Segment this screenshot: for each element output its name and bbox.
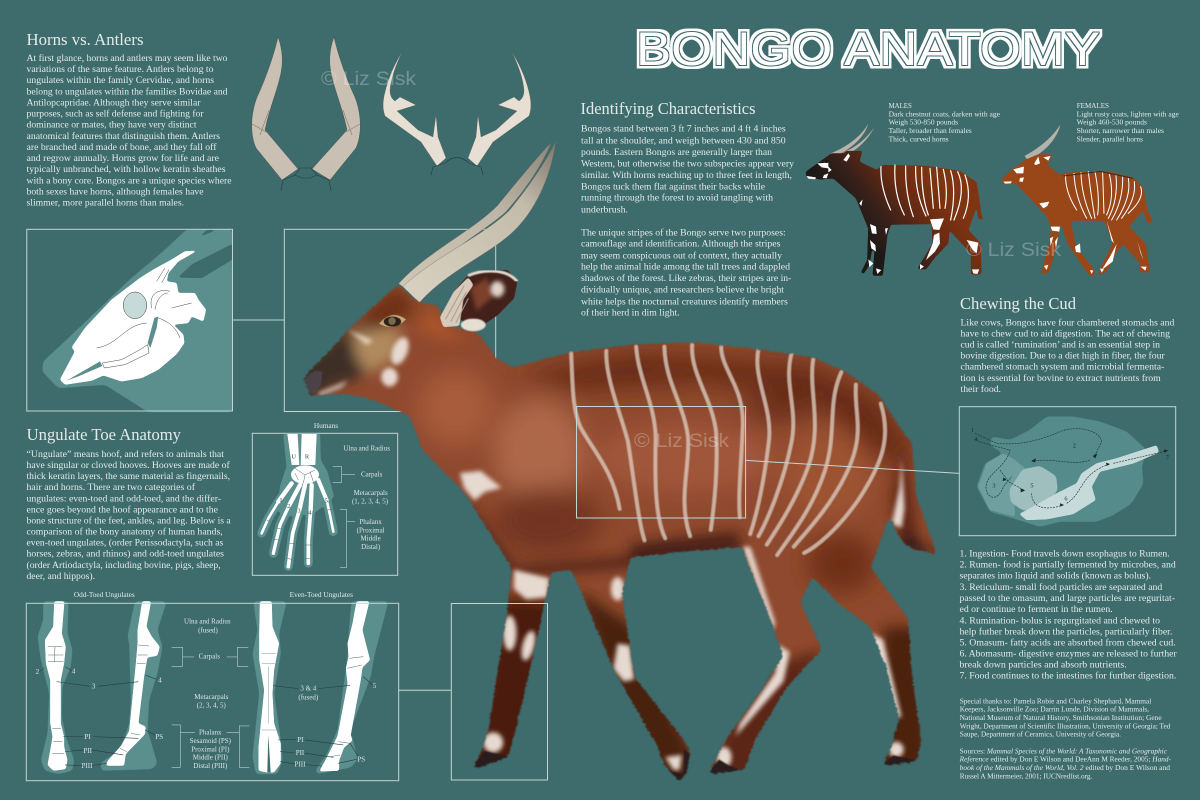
text block: horns vs antlers: typically unbranched, with hollow keratin sheathes	[26, 165, 226, 175]
labels: hand: Carpals	[361, 471, 383, 479]
text block: stripes: camouflage and identification. Although the stripes	[581, 239, 781, 250]
labels: ungulate bones	[36, 618, 377, 770]
text block: females: Weigh 460-530 pounds	[1077, 118, 1147, 127]
labels: ungulate bones: PII	[296, 749, 305, 757]
head shading	[294, 287, 414, 399]
text block: males	[889, 101, 1000, 143]
text block: ungulate: “Ungulate” means hoof, and refers to animals that	[26, 449, 224, 460]
panel: stomach diagram: 2	[1073, 443, 1076, 450]
text block: digestion steps: 5. Omasum- fatty acids are absorbed from chewed cud.	[960, 637, 1176, 648]
labels: ungulate bones: Proximal (PI)	[191, 745, 230, 753]
text block: stripes: The unique stripes of the Bongo serve two purposes:	[581, 227, 786, 238]
text block: ungulate: deer, and hippos).	[26, 571, 95, 582]
text block: sources: book of the Mammals of the World, Vol. 2 edited by Don E Wilson and	[960, 763, 1170, 772]
text block: stripes: dividually unique, and researchers believe the bright	[581, 286, 784, 296]
text block: stripes: shadows of the forest. Like zebras, their stripes are in-	[581, 273, 791, 284]
text block: sources: Russel A Mittermeier, 2001; IUCNredlist.org.	[960, 771, 1092, 780]
labels: ungulate bones: Ulna and Radius	[184, 618, 231, 626]
title: BONGO ANATOMY	[636, 22, 1100, 75]
panel: stomach diagram	[959, 407, 1176, 536]
labels: hand: (Proximal	[357, 526, 385, 534]
text block: horns vs antlers: Antilopcapridae. Although they serve similar	[26, 98, 201, 108]
icon: abomasum	[1019, 445, 1159, 520]
icon: odd-toed leg front	[38, 601, 74, 774]
text block: ungulate: hair and horns. There are two categories of	[26, 482, 196, 493]
icon: far horn	[399, 143, 551, 292]
text block: males: Weigh 530-850 pounds	[889, 118, 958, 127]
text block: stripes: white helps the nocturnal creatures identify members	[581, 296, 788, 307]
text block: horns vs antlers: purposes, such as self defense and fighting for	[26, 109, 204, 120]
text block: rumination: bovine digestion. Due to a diet high in fiber, the four	[960, 351, 1166, 362]
text block: size and subspecies: running through the forest to avoid tangling with	[581, 193, 773, 204]
labels: ungulate bones: PS	[155, 733, 163, 741]
panel: head callout frame	[284, 229, 496, 412]
labels: ungulate bones: PIII	[82, 762, 93, 770]
labels: ungulate bones: 2	[36, 668, 40, 676]
text block: special thanks: Keepers, Jacksonville Zoo; Darrin Lunde, Division of Mammals,	[960, 705, 1149, 714]
labels: ungulate bones: 5	[373, 682, 377, 690]
labels: ungulate bones: PII	[83, 747, 93, 755]
text block: size and subspecies: Western, but otherwise the two subspecies appear very	[581, 159, 794, 169]
panel: horns vs antlers text	[26, 30, 232, 208]
text block: digestion steps: passed to the omasum, and large particles are reguritat-	[960, 594, 1175, 604]
text block: horns vs antlers: and regrow annually. Horns grow for life and are	[26, 153, 219, 164]
labels: ungulate bones: Distal (PIII)	[193, 762, 228, 770]
text block: ungulate: bone structure of the feet, ankles, and leg. Below is a	[26, 515, 232, 526]
icon: antlers pair	[383, 52, 531, 175]
text block: rumination: Like cows, Bongos have four chambered stomachs and	[960, 317, 1175, 328]
icon: near horn	[403, 143, 555, 303]
panel: stomach diagram: 4	[974, 436, 978, 443]
text block: horns vs antlers: slimmer, more parallel horns than males.	[26, 198, 184, 208]
icon: hand silhouette	[262, 434, 334, 567]
text block: special thanks: Saupe, Department of Ceramics, University of Georgia.	[960, 730, 1121, 739]
icon: even-toed leg side	[316, 601, 388, 774]
text block: females	[1077, 101, 1179, 143]
labels: hand: Distal)	[361, 543, 381, 551]
text block: rumination	[960, 317, 1175, 395]
text block: horns vs antlers	[26, 53, 232, 208]
panel: body callout frame	[576, 406, 746, 518]
text block: ungulate: even-toed ungulates, (order Perissodactyla, such as	[26, 538, 224, 549]
text block: stripes: of their herd in dim light.	[581, 307, 680, 318]
text block: females: Shorter, narrower than males	[1077, 126, 1164, 135]
panel: stomach diagram: 5	[1030, 483, 1034, 490]
labels: ungulate bones: (fused)	[298, 693, 319, 701]
text block: horns vs antlers: ungulates within the family Cervidae, and horns	[26, 75, 214, 86]
labels: ungulate bones: PS	[357, 755, 365, 763]
text block: horns vs antlers: with a bony core. Bongos are a unique species where	[26, 176, 232, 186]
icon: hand bones	[262, 434, 333, 567]
labels: ungulate bones: Middle (PII)	[193, 754, 229, 762]
text block: digestion steps	[960, 550, 1178, 682]
panel: stomach diagram: 1	[971, 427, 974, 434]
icon: omasum	[1009, 466, 1058, 511]
text block: horns vs antlers: anatomical features that distinguish them. Antlers	[26, 131, 220, 142]
text block: digestion steps: separates into liquid and solids (known as bolus).	[960, 571, 1151, 582]
text block: ungulate: ungulates: even-toed and odd-toed, and the differ-	[26, 493, 221, 504]
text block: special thanks	[960, 696, 1171, 739]
icon: eye	[379, 315, 406, 327]
panel: chewing the cud text	[960, 294, 1175, 395]
text block: ungulate: have singular or cloved hooves. Hooves are made of	[26, 460, 231, 471]
text block: horns vs antlers: dominance or mates, they have very distinct	[26, 121, 197, 131]
icon: horns pair	[252, 37, 360, 191]
text block: ungulate: thick keratin layers, the same material as fingernails,	[26, 471, 230, 482]
text block: digestion steps: 6. Abomasum- digestive enzymes are released to further	[960, 649, 1178, 660]
labels: ungulate bones: PIII	[295, 760, 306, 768]
text block: rumination: have to chew cud to aid digestion. The act of chewing	[960, 328, 1170, 339]
watermark: © Liz Sisk	[966, 240, 1062, 261]
main illustration: bongo	[290, 143, 962, 795]
text block: males: MALES	[889, 101, 912, 110]
label: even-toed ungulates: Even-Toed Ungulates	[290, 590, 353, 599]
labels: hand: (1, 2, 3, 4, 5)	[352, 497, 389, 505]
panel: skull	[27, 229, 232, 412]
labels: hand: Ulna and Radius	[343, 445, 390, 453]
text block: special thanks: National Museum of Natural History, Smithsonian Institution; Gene	[960, 713, 1162, 722]
icon: hand bones: R	[305, 454, 310, 461]
text block: horns vs antlers: belong to ungulates within the families Bovidae and	[26, 86, 228, 97]
white leg and body markings	[460, 471, 501, 500]
heading: identifying characteristics: Identifying Characteristics	[580, 99, 756, 118]
text block: digestion steps: 1. Ingestion- Food travels down esophagus to Rumen.	[960, 550, 1170, 560]
text block: ungulate	[26, 449, 232, 582]
labels: ungulate bones: PI	[297, 736, 304, 744]
text block: size and subspecies: similar. With horns reaching up to three feet in length,	[581, 170, 792, 181]
label: humans: Humans	[314, 421, 338, 430]
text block: ungulate: ence goes beyond the hoof appearance and to the	[26, 504, 218, 515]
icon: hand bones: 2	[287, 503, 290, 510]
labels: ungulate bones: (2, 3, 4, 5)	[197, 701, 227, 709]
watermark: © Liz Sisk	[634, 431, 730, 452]
text block: digestion steps: 3. Reticulum- small food particles are separated and	[960, 582, 1163, 593]
heading: chewing the cud: Chewing the Cud	[960, 294, 1077, 313]
text block: size and subspecies: Bongos tuck them flat against their backs while	[581, 181, 765, 192]
heading: ungulate toe anatomy: Ungulate Toe Anatomy	[27, 425, 182, 444]
arrows: digestion path	[975, 429, 1167, 508]
heading: horns vs antlers: Horns vs. Antlers	[26, 30, 144, 49]
text block: females: FEMALES	[1077, 101, 1109, 110]
text block: digestion steps: 2. Rumen- food is partially fermented by microbes, and	[960, 560, 1176, 571]
labels: ungulate bones: Sesamoid (PS)	[190, 737, 232, 745]
text block: ungulate: comparison of the bony anatomy of human hands,	[26, 527, 223, 538]
text block: rumination: tion is essential for bovine to extract nutrients from	[960, 373, 1161, 384]
text block: size and subspecies: tall at the shoulder, and weigh between 430 and 850	[581, 136, 786, 146]
panel: stomach diagram: 6	[1064, 495, 1068, 502]
text block: horns vs antlers: variations of the same feature. Antlers belong to	[26, 64, 214, 75]
text block: ungulate: horses, zebras, and rhinos) and odd-toed ungulates	[26, 549, 224, 560]
text block: rumination: chambered stomach system and microbial fermenta-	[960, 362, 1164, 373]
text block: horns vs antlers: At first glance, horns and antlers may seem like two	[26, 53, 228, 64]
icon: hand bones: 4	[308, 509, 312, 516]
labels: ungulate bones: Carpals	[199, 653, 220, 661]
text block: digestion steps: ed or continue to ferment in the rumen.	[960, 604, 1113, 615]
text block: sources	[959, 746, 1172, 780]
text block: stripes	[581, 227, 791, 318]
labels: hand	[343, 445, 390, 551]
labels: ungulate bones: 3 & 4	[300, 685, 317, 693]
text block: size and subspecies	[581, 124, 794, 215]
stripes	[571, 345, 885, 555]
labels: hand: Middle	[361, 535, 381, 543]
text block: females: Slender, parallel horns	[1077, 134, 1143, 143]
watermark: © Liz Sisk	[321, 69, 417, 90]
text block: special thanks: Special thanks to: Pamela Robie and Charley Shephard, Mammal	[960, 696, 1151, 705]
body	[303, 286, 936, 781]
text block: ungulate: (order Artiodactyla, including bovine, pigs, sheep,	[26, 560, 221, 571]
labels: ungulate bones: 4	[72, 667, 76, 675]
text block: males: Taller, broader than females	[889, 126, 972, 135]
text block: digestion steps: 7. Food continues to the intestines for further digestion.	[960, 671, 1176, 682]
icon: hand bones: 3	[297, 508, 301, 515]
labels: ungulate bones: Phalanx	[199, 729, 222, 737]
labels: hand: Phalanx	[359, 518, 382, 526]
text block: sources: Sources: Mammal Species of the World: A Taxonomic and Geographic	[960, 746, 1168, 755]
labels: hand: Metacarpals	[354, 489, 388, 497]
text block: sources: Reference edited by Don E Wilson and DeeAnn M Reeder, 2005; Hand-	[959, 755, 1172, 764]
text block: digestion steps: help futher break down the particles, particularly fiber.	[960, 626, 1172, 637]
text block: size and subspecies: Bongos stand between 3 ft 7 inches and 4 ft 4 inches	[581, 124, 786, 135]
icon: skull	[60, 251, 206, 385]
labels: ungulate bones: (fused)	[198, 626, 219, 634]
icon: hand bones: 5	[325, 498, 328, 505]
text block: special thanks: Wright, Department of Scientific Illustration, University of Georgia; Ted	[960, 721, 1171, 730]
panel: identifying characteristics text	[580, 99, 794, 318]
hooves	[474, 749, 914, 780]
text block: digestion steps: 4. Rumination- bolus is regurgitated and chewed to	[960, 616, 1160, 626]
text block: horns vs antlers: are branched and made of bone, and they fall off	[26, 142, 217, 153]
icon: rumen	[977, 417, 1147, 527]
label: odd-toed ungulates: Odd-Toed Ungulates	[74, 590, 135, 599]
text block: males: Thick, curved horns	[889, 134, 949, 143]
text block: rumination: their food.	[960, 384, 1001, 395]
panel: ungulate toe anatomy text	[26, 425, 232, 582]
icon: odd-toed leg side	[101, 601, 167, 771]
icon: hand bones: 1	[279, 497, 283, 504]
text block: horns vs antlers: both sexes have horns, although females have	[26, 186, 204, 197]
text block: stripes: may seem conspicuous out of context, they actually	[581, 250, 782, 261]
text block: size and subspecies: underbrush.	[581, 205, 628, 215]
panel: stomach diagram: 3	[992, 483, 996, 490]
panel: hoof callout frame	[451, 604, 548, 780]
icon: male bongo	[806, 123, 984, 276]
text block: digestion steps: break down particles and absorb nutrients.	[960, 661, 1127, 671]
icon: even-toed leg front	[253, 601, 287, 774]
icon: reticulum	[978, 453, 1027, 517]
panel: ungulate comparison diagram	[26, 601, 399, 781]
icon: female bongo	[1001, 124, 1153, 277]
text block: rumination: cud is called ‘rumination’ and is an essential step in	[960, 340, 1160, 350]
panel: human hand diagram	[252, 433, 398, 575]
text block: females: Light rusty coats, lighten with age	[1077, 109, 1179, 118]
watermark	[321, 69, 1062, 452]
text block: stripes: help the animal hide among the tall trees and dappled	[581, 263, 790, 273]
labels: ungulate bones: 3	[92, 683, 96, 691]
icon: hand bones: U	[291, 454, 296, 461]
icon: ear	[440, 270, 517, 331]
labels: ungulate bones: 4	[158, 676, 162, 684]
panel: stomach diagram: 7	[1166, 454, 1169, 461]
labels: ungulate bones: Metacarpals	[194, 693, 229, 701]
labels: ungulate bones: PI	[85, 733, 91, 741]
text block: males: Dark chestnut coats, darken with age	[889, 109, 1000, 118]
text block: size and subspecies: pounds. Eastern Bongos are generally larger than	[581, 148, 772, 158]
